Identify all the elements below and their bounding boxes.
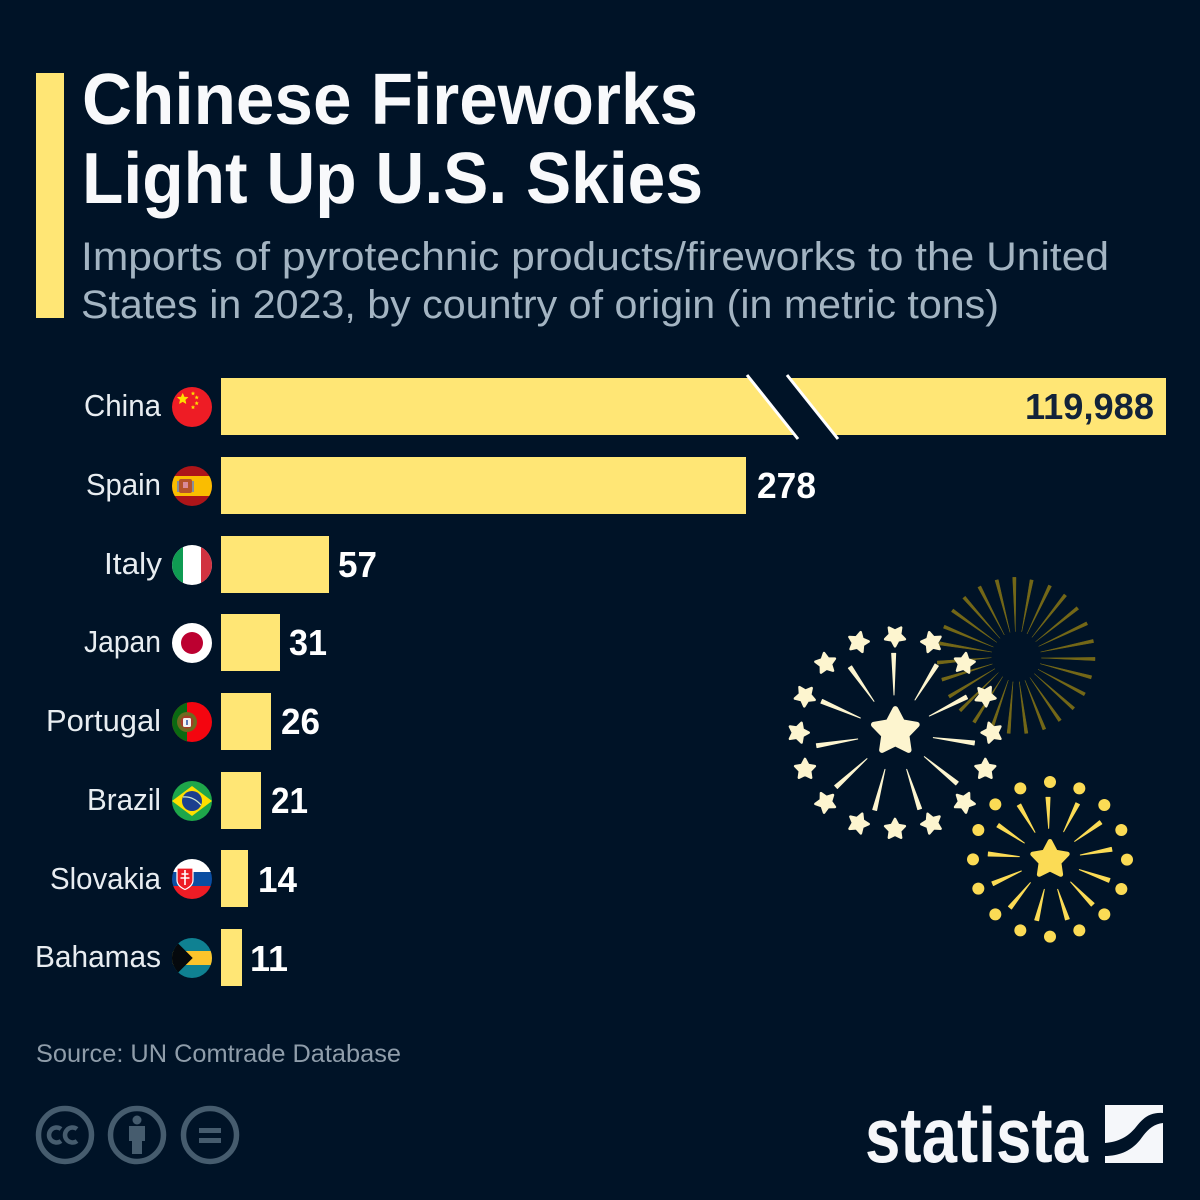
flag: Brazil (172, 781, 212, 821)
statista logo: statista (865, 1091, 1088, 1179)
firework: olive burst (937, 577, 1095, 734)
row labels: Spain (86, 467, 161, 502)
firework: cream star burst (790, 628, 1000, 838)
icon: no derivatives (184, 1108, 236, 1162)
flag: Slovakia (172, 859, 212, 899)
title (82, 60, 703, 219)
subtitle (81, 235, 1109, 327)
row labels: Brazil (87, 782, 161, 817)
value labels: 31 (289, 622, 327, 663)
title: Light Up U.S. Skies (82, 139, 703, 219)
row labels (35, 388, 163, 974)
bars (221, 378, 1166, 986)
row labels: Japan (84, 624, 161, 659)
row labels: Portugal (46, 703, 161, 738)
flag: Japan (172, 623, 212, 663)
flag: Bahamas (172, 938, 212, 978)
value labels: 26 (281, 701, 320, 742)
icon: statista mark (1105, 1105, 1163, 1163)
accent bar (36, 73, 64, 318)
flag: Spain (172, 466, 212, 506)
flag: Portugal (172, 702, 212, 742)
row labels: Slovakia (50, 861, 162, 896)
fireworks illustration (790, 577, 1133, 943)
icon: attribution (110, 1108, 164, 1162)
icon: creative commons (38, 1108, 92, 1162)
axis break on China bar (747, 375, 838, 439)
row labels: Italy (104, 546, 163, 581)
title: Chinese Fireworks (82, 60, 698, 140)
row labels: Bahamas (35, 939, 161, 974)
value labels: 57 (338, 544, 377, 585)
value labels: 278 (757, 465, 816, 506)
subtitle: States in 2023, by country of origin (in metric tons) (81, 283, 999, 327)
bar chart (35, 375, 1166, 986)
flag: China (172, 387, 212, 427)
row labels: China (84, 388, 162, 423)
value labels: 21 (271, 780, 308, 821)
value labels: 14 (258, 859, 297, 900)
subtitle: Imports of pyrotechnic products/fireworks to the United (81, 235, 1109, 279)
value labels: 11 (250, 938, 288, 979)
value labels: 119,988 (1025, 386, 1154, 427)
flag: Italy (172, 545, 212, 585)
value labels (250, 386, 1154, 979)
firework: yellow dot burst (967, 776, 1133, 943)
source note: Source: UN Comtrade Database (36, 1040, 401, 1068)
